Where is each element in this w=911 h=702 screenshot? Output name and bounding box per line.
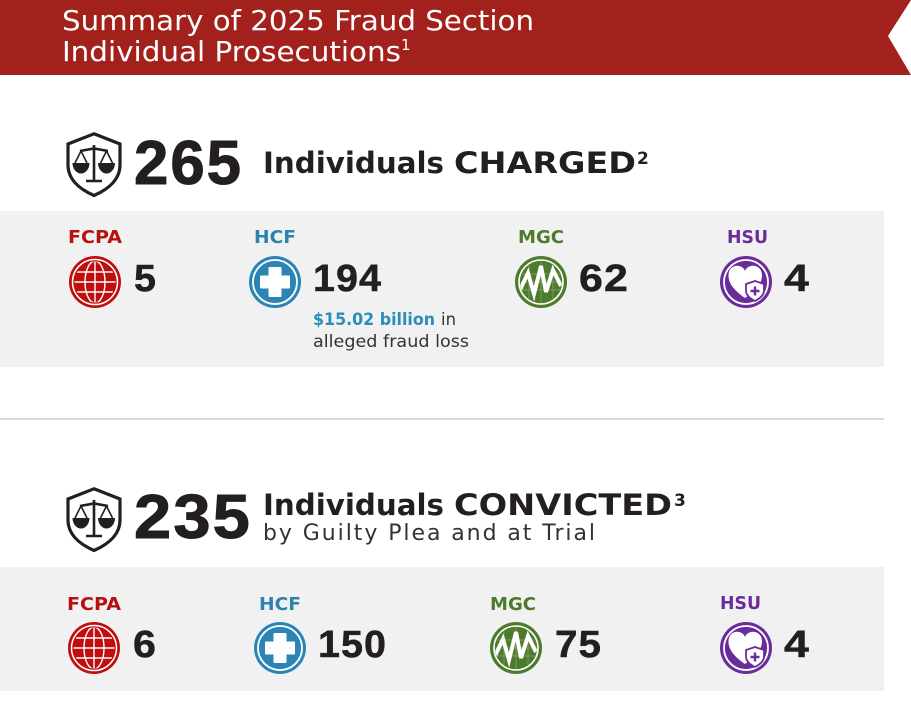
alleged fraud loss note: $15.02 billion xyxy=(313,310,435,330)
panel: convicted breakdown xyxy=(0,567,884,691)
HSU convicted xyxy=(720,593,810,674)
panel: charged breakdown xyxy=(0,211,884,367)
HCF charged xyxy=(249,227,469,352)
FCPA convicted: FCPA xyxy=(67,594,121,615)
HCF charged: HCF xyxy=(254,227,296,248)
MGC charged: MGC xyxy=(518,227,564,248)
MGC charged: 62 xyxy=(579,258,629,300)
MGC charged xyxy=(515,227,629,308)
HSU charged: 4 xyxy=(784,258,810,300)
FCPA convicted: 6 xyxy=(133,624,157,666)
FCPA charged: FCPA xyxy=(68,227,122,248)
convicted label: 3 xyxy=(674,491,686,511)
convicted label: CONVICTED xyxy=(454,488,672,522)
HSU charged xyxy=(720,227,810,308)
alleged fraud loss note: in xyxy=(441,310,456,330)
charged label: 2 xyxy=(637,149,649,169)
FCPA charged: 5 xyxy=(134,258,157,300)
MGC convicted: 75 xyxy=(555,624,602,666)
panel: individuals charged heading xyxy=(68,129,649,198)
convicted sublabel: by Guilty Plea and at Trial xyxy=(263,521,595,546)
HSU convicted: HSU xyxy=(720,593,761,614)
icon: scales of justice shield xyxy=(68,489,120,550)
panel: individuals convicted heading xyxy=(68,483,686,552)
header banner xyxy=(0,0,911,75)
HCF convicted: 150 xyxy=(318,624,387,666)
banner title: Summary of 2025 Fraud Section xyxy=(62,4,534,37)
MGC convicted: MGC xyxy=(490,594,536,615)
icon: scales of justice shield xyxy=(68,134,120,196)
HCF convicted xyxy=(254,594,387,674)
banner title: Individual Prosecutions xyxy=(62,35,401,68)
charged label: Individuals xyxy=(263,146,444,180)
convicted total: 235 xyxy=(134,483,252,552)
banner title: 1 xyxy=(401,36,411,54)
HSU charged: HSU xyxy=(727,227,768,248)
FCPA convicted xyxy=(67,594,157,674)
charged total: 265 xyxy=(134,129,243,198)
MGC convicted xyxy=(490,594,602,674)
HCF charged: 194 xyxy=(313,258,382,300)
alleged fraud loss note: alleged fraud loss xyxy=(313,332,469,352)
FCPA charged xyxy=(68,227,157,308)
HCF convicted: HCF xyxy=(259,594,301,615)
charged label: CHARGED xyxy=(454,146,636,180)
convicted label: Individuals xyxy=(263,488,444,522)
HSU convicted: 4 xyxy=(784,624,810,666)
